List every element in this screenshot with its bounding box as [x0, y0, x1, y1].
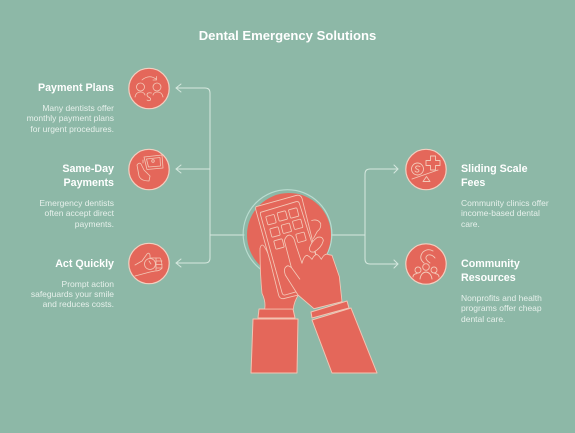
icon: community resources: [406, 244, 446, 284]
icon: payment plans: [129, 68, 169, 109]
central illustration: hands on a phone keypad: [243, 190, 377, 373]
thumb: [309, 237, 323, 252]
left text: act quickly: Act Quickly: [55, 258, 114, 270]
right text: sliding scale fees: income-based dental: [461, 208, 540, 218]
left text: payment plans: [27, 82, 114, 134]
left text: payment plans: for urgent procedures.: [30, 124, 114, 134]
icon: sliding scale fees: [406, 149, 446, 190]
right text: sliding scale fees: Community clinics offer: [461, 198, 549, 208]
left text: payment plans: monthly payment plans: [27, 113, 114, 123]
left text: same-day payments: often accept direct: [45, 208, 114, 218]
title: Dental Emergency Solutions: [199, 28, 376, 43]
left text: same-day payments: [39, 163, 114, 229]
phone: [256, 195, 321, 299]
right text: community resources: programs offer cheap: [461, 303, 542, 313]
left hand: [260, 245, 298, 309]
right text: community resources: dental care.: [461, 314, 505, 324]
right sleeve: [311, 301, 377, 373]
right text: sliding scale fees: Fees: [461, 177, 485, 189]
left text: same-day payments: Emergency dentists: [39, 198, 114, 208]
connector: left bracket with arrows: [176, 84, 244, 267]
icon: same-day payments: [129, 149, 169, 190]
left text: act quickly: Prompt action: [62, 278, 114, 288]
central circle: [243, 190, 332, 278]
left text: payment plans: Many dentists offer: [42, 103, 114, 113]
right text: sliding scale fees: [461, 163, 549, 229]
right text: community resources: Nonprofits and health: [461, 293, 542, 303]
left text: act quickly: and reduces costs.: [43, 299, 114, 309]
left text: same-day payments: Same-Day: [62, 163, 114, 175]
left sleeve: [251, 309, 298, 373]
left text: payment plans: Payment Plans: [38, 82, 114, 94]
left text: same-day payments: Payments: [64, 177, 114, 189]
right text: sliding scale fees: care.: [461, 219, 480, 229]
left text: act quickly: [31, 258, 114, 309]
right text: community resources: Community: [461, 258, 520, 270]
icon: act quickly: [129, 243, 169, 284]
right hand: [284, 235, 342, 309]
connector: right bracket with arrows: [331, 165, 398, 268]
right text: community resources: Resources: [461, 272, 516, 284]
left text: act quickly: safeguards your smile: [31, 289, 114, 299]
keypad keys: [266, 208, 306, 249]
right text: community resources: [461, 258, 542, 324]
right text: sliding scale fees: Sliding Scale: [461, 163, 528, 175]
left text: same-day payments: payments.: [75, 219, 114, 229]
